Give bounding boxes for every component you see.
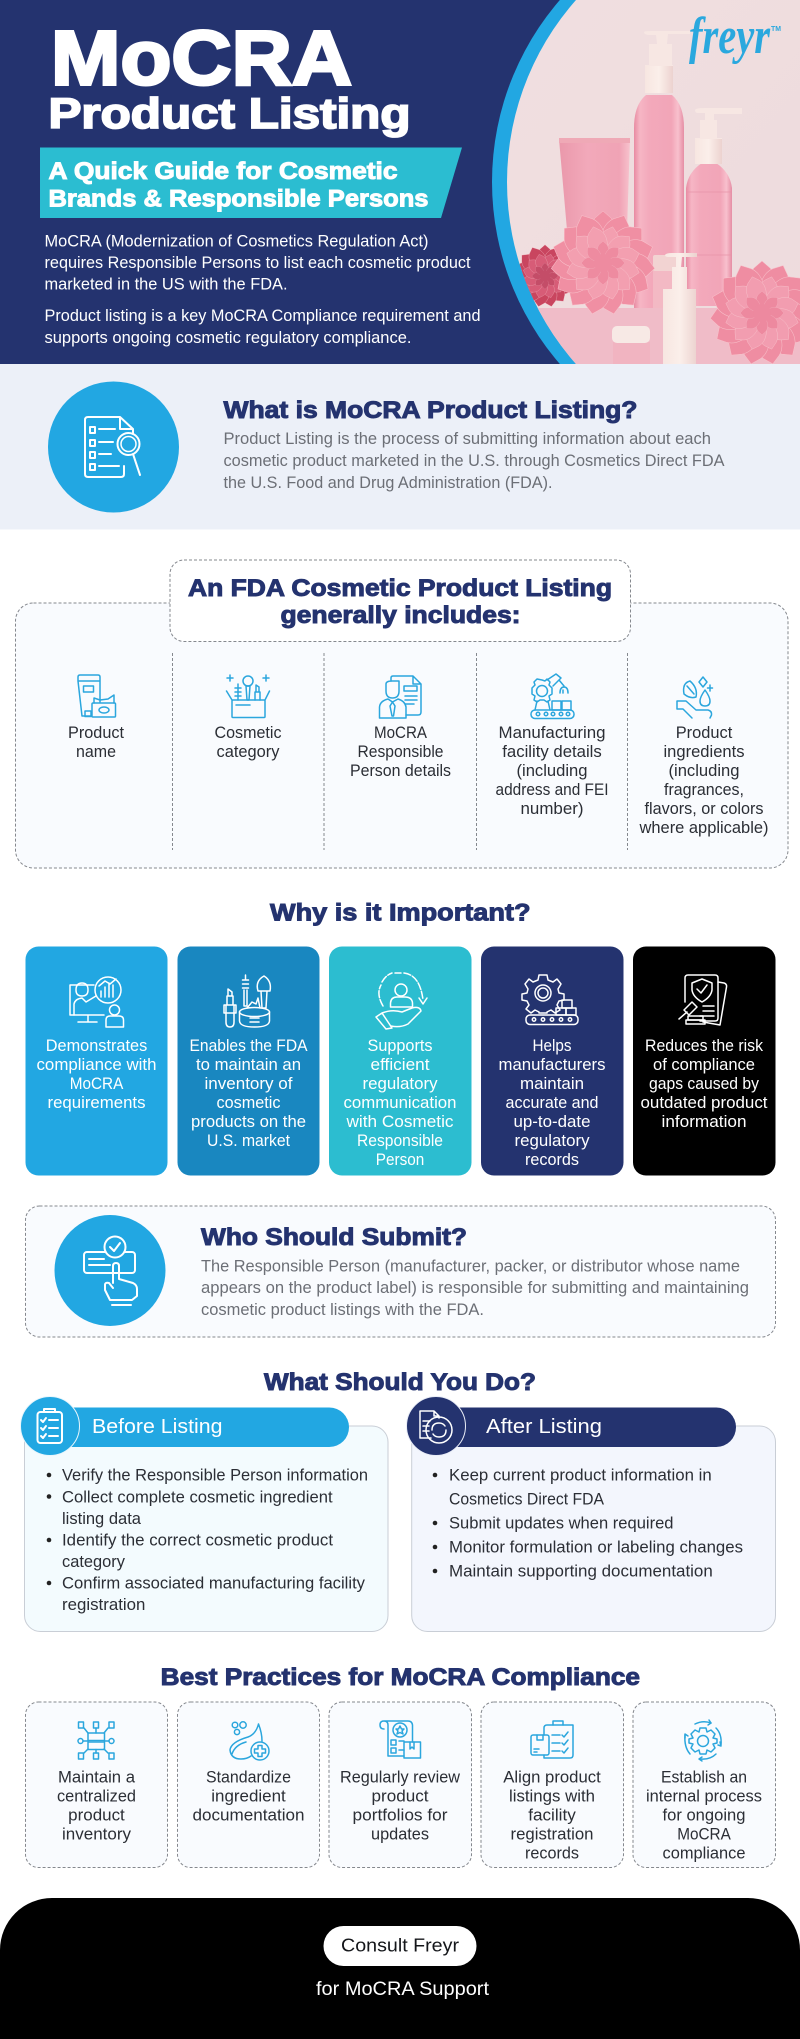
icon: gear cycle — [685, 1720, 721, 1761]
column: manufacturing facility: Manufacturing — [498, 724, 606, 742]
column: manufacturing facility — [496, 674, 608, 818]
card: supports communication: with Cosmetic — [345, 1113, 454, 1131]
card: align product listings: listings with — [509, 1787, 595, 1805]
tab: after listing — [406, 1396, 736, 1456]
card: supports communication: Responsible — [357, 1132, 443, 1150]
card: enables the FDA: cosmetic — [216, 1094, 280, 1112]
card: reduces the risk: outdated product — [640, 1094, 768, 1112]
card: internal process: Establish an — [661, 1768, 747, 1786]
heading box: An FDA Cosmetic Product Listing — [188, 575, 612, 602]
heading box: generally includes: — [280, 602, 520, 629]
intro text: supports ongoing cosmetic regulatory compliance. — [44, 329, 412, 347]
card: demonstrates compliance — [26, 946, 168, 1176]
intro text — [44, 232, 480, 347]
card: helps manufacturers: manufacturers — [498, 1056, 606, 1074]
description: the U.S. Food and Drug Administration (FDA). — [224, 474, 552, 492]
footer text: for MoCRA Support — [316, 1979, 490, 2000]
card: enables the FDA — [178, 946, 320, 1176]
subtitle banner — [40, 148, 462, 218]
small dark flower — [520, 244, 569, 306]
card: enables the FDA: products on the — [191, 1113, 306, 1131]
cream jar — [612, 326, 650, 343]
card: enables the FDA: Enables the FDA — [190, 1037, 308, 1055]
bullet list: category — [62, 1553, 126, 1571]
column: product ingredients: fragrances, — [664, 781, 744, 799]
card: demonstrates compliance: compliance with — [36, 1056, 156, 1074]
bullet list — [47, 1466, 368, 1614]
card: centralized inventory: Maintain a — [58, 1768, 136, 1786]
bullet list: Cosmetics Direct FDA — [449, 1491, 604, 1509]
product tube — [559, 138, 630, 230]
card: enables the FDA: U.S. market — [207, 1132, 290, 1150]
intro text: marketed in the US with the FDA. — [44, 276, 288, 294]
card: align product listings: Align product — [503, 1768, 601, 1786]
card: reduces the risk: of compliance — [653, 1056, 755, 1074]
card: align product listings: facility — [528, 1806, 577, 1824]
footer — [0, 1898, 800, 2039]
tab: before listing: Before Listing — [92, 1416, 222, 1438]
column: product ingredients: where applicable) — [639, 819, 768, 837]
card: review portfolios: Regularly review — [340, 1768, 460, 1786]
heading: Who Should Submit? — [201, 1224, 467, 1251]
card: helps manufacturers — [481, 946, 624, 1176]
icon: robot arm on conveyor — [531, 674, 574, 718]
column: cosmetic category: Cosmetic — [214, 724, 282, 742]
card: internal process — [633, 1702, 776, 1868]
column: manufacturing facility: (including — [516, 762, 588, 780]
bullet list: Maintain supporting documentation — [449, 1563, 713, 1581]
card: align product listings: registration — [510, 1825, 594, 1843]
column: manufacturing facility: address and FEI — [496, 781, 608, 799]
card: supports communication: Supports — [368, 1037, 432, 1055]
panel: after listing — [406, 1396, 776, 1632]
card: reduces the risk: gaps caused by — [649, 1075, 760, 1093]
description: appears on the product label) is responsible for submitting and maintaining — [201, 1279, 749, 1297]
subtitle banner: A Quick Guide for Cosmetic — [48, 158, 398, 185]
panel: who should submit — [26, 1206, 776, 1337]
logo: freyr: TM — [771, 26, 781, 33]
heading: What is MoCRA Product Listing? — [224, 397, 638, 424]
card: centralized inventory: centralized — [57, 1787, 136, 1805]
card: centralized inventory: product — [68, 1806, 125, 1824]
description: cosmetic product listings with the FDA. — [201, 1301, 484, 1319]
card: helps manufacturers: Helps — [532, 1037, 572, 1055]
card: supports communication: communication — [344, 1094, 456, 1112]
column: product name — [68, 675, 124, 761]
icon: makeup box — [226, 675, 270, 718]
title: MoCRA Product Listing: MoCRA — [51, 16, 352, 102]
column: responsible person: Person details — [350, 762, 451, 780]
card: demonstrates compliance: MoCRA — [70, 1075, 123, 1093]
icon: gear and conveyor — [522, 975, 578, 1024]
column: product ingredients — [639, 677, 768, 837]
platform — [538, 308, 800, 364]
card: helps manufacturers: accurate and — [506, 1094, 598, 1112]
description: cosmetic product marketed in the U.S. through Cosmetics Direct FDA — [224, 452, 724, 470]
column: product ingredients: (including — [668, 762, 740, 780]
card: centralized inventory — [26, 1702, 168, 1868]
column: cosmetic category — [214, 675, 282, 761]
small jar behind — [653, 255, 678, 308]
subtitle banner: Brands & Responsible Persons — [48, 186, 428, 212]
small white pump bottle — [663, 253, 697, 364]
card: review portfolios: updates — [371, 1825, 429, 1843]
title: MoCRA Product Listing — [48, 16, 410, 138]
heading box — [170, 560, 630, 642]
bullet list: Confirm associated manufacturing facility — [62, 1575, 366, 1593]
card: enables the FDA: to maintain an — [196, 1056, 301, 1074]
column: product ingredients: ingredients — [664, 743, 744, 761]
panel: what is MoCRA product listing — [0, 364, 800, 530]
icon: data hub — [78, 1722, 114, 1759]
card: helps manufacturers: records — [525, 1151, 579, 1169]
card: internal process: internal process — [646, 1787, 762, 1805]
panel: hero header background — [0, 0, 800, 364]
card: standardize documentation: Standardize — [206, 1768, 291, 1786]
big pink flower — [549, 210, 657, 317]
bullet list: Identify the correct cosmetic product — [62, 1532, 333, 1550]
column: responsible person: MoCRA — [374, 724, 427, 742]
card: supports communication — [329, 946, 472, 1176]
column: product ingredients: Product — [676, 724, 733, 742]
column: product name: name — [76, 743, 116, 761]
tab: before listing — [20, 1396, 349, 1456]
description — [201, 1258, 749, 1319]
bullet list: registration — [62, 1596, 145, 1614]
button: consult freyr: Consult Freyr — [341, 1935, 459, 1956]
tab: after listing: After Listing — [486, 1416, 602, 1438]
right pink flower — [708, 260, 800, 367]
column: manufacturing facility: number) — [520, 800, 584, 818]
column: manufacturing facility: facility details — [502, 743, 602, 761]
card: standardize documentation: ingredient — [211, 1787, 286, 1805]
heading: why is it important: Why is it Important? — [270, 900, 530, 926]
card: helps manufacturers: up-to-date — [514, 1113, 590, 1131]
card: internal process: for ongoing — [662, 1806, 746, 1824]
heading: what should you do: What Should You Do? — [264, 1369, 536, 1396]
column: product ingredients: flavors, or colors — [644, 800, 764, 818]
card: helps manufacturers: maintain — [520, 1075, 584, 1093]
icon: card with pointing hand — [54, 1215, 166, 1326]
intro text: Product listing is a key MoCRA Compliance requirement and — [44, 307, 480, 325]
icon: document with refresh — [420, 1411, 452, 1443]
column: responsible person: Responsible — [358, 743, 444, 761]
icon: document with magnifier — [48, 382, 179, 512]
card: align product listings — [481, 1702, 624, 1868]
icon: tube and jar — [78, 675, 116, 717]
card: supports communication: efficient — [370, 1056, 430, 1074]
title: MoCRA Product Listing: Product Listing — [48, 90, 410, 138]
icon: makeup set — [224, 975, 270, 1027]
icon: hand with drop and leaf — [677, 677, 712, 718]
right pump bottle — [686, 108, 742, 306]
card: review portfolios: product — [372, 1787, 429, 1805]
bullet list: Collect complete cosmetic ingredient — [62, 1488, 333, 1506]
card: enables the FDA: inventory of — [204, 1075, 293, 1093]
column: responsible person — [350, 676, 451, 780]
icon: person with document — [380, 676, 421, 718]
logo: freyr: freyr — [689, 8, 771, 65]
bullet list: Verify the Responsible Person information — [62, 1466, 368, 1484]
heading: best practices: Best Practices for MoCRA Compliance — [161, 1664, 640, 1691]
intro text: requires Responsible Persons to list each cosmetic product — [44, 254, 471, 272]
button: consult freyr — [324, 1926, 476, 1966]
card: standardize documentation: documentation — [192, 1806, 304, 1824]
bullet list: Keep current product information in — [449, 1466, 712, 1484]
description: Product Listing is the process of submitting information about each — [224, 430, 711, 448]
card: reduces the risk: information — [662, 1113, 746, 1131]
column: product name: Product — [68, 724, 124, 742]
icon: scroll and box — [380, 1721, 420, 1758]
panel: listing includes — [16, 560, 788, 868]
intro text: MoCRA (Modernization of Cosmetics Regulation Act) — [44, 232, 428, 250]
card: review portfolios — [329, 1702, 472, 1868]
description — [224, 430, 724, 492]
card: supports communication: Person — [376, 1151, 424, 1169]
icon: drop with plus — [230, 1722, 269, 1760]
card: helps manufacturers: regulatory — [514, 1132, 590, 1150]
bullet list: Monitor formulation or labeling changes — [449, 1539, 743, 1557]
card: review portfolios: portfolios for — [352, 1806, 448, 1824]
bullet list — [433, 1466, 743, 1581]
card: reduces the risk — [633, 946, 776, 1176]
tall pump bottle — [634, 31, 690, 310]
column: cosmetic category: category — [216, 743, 280, 761]
card: internal process: compliance — [662, 1844, 746, 1862]
card: centralized inventory: inventory — [62, 1825, 132, 1843]
card: demonstrates compliance: Demonstrates — [46, 1037, 147, 1055]
card: internal process: MoCRA — [677, 1825, 731, 1843]
description: The Responsible Person (manufacturer, packer, or distributor whose name — [201, 1258, 740, 1276]
panel: before listing — [20, 1396, 388, 1632]
bullet list: Submit updates when required — [449, 1515, 674, 1533]
icon: shield document and gavel — [679, 975, 727, 1025]
icon: clipboard with box — [531, 1721, 573, 1758]
card: align product listings: records — [525, 1844, 579, 1862]
icon: checklist — [38, 1409, 62, 1443]
icon: presenter with chart — [70, 977, 124, 1027]
card: supports communication: regulatory — [362, 1075, 438, 1093]
card: reduces the risk: Reduces the risk — [645, 1037, 764, 1055]
card: standardize documentation — [178, 1702, 320, 1868]
card: demonstrates compliance: requirements — [48, 1094, 146, 1112]
icon: person in hand with cycle — [376, 973, 427, 1029]
hero photo: cosmetic bottles and flowers — [492, 0, 800, 364]
bullet list: listing data — [62, 1510, 142, 1528]
